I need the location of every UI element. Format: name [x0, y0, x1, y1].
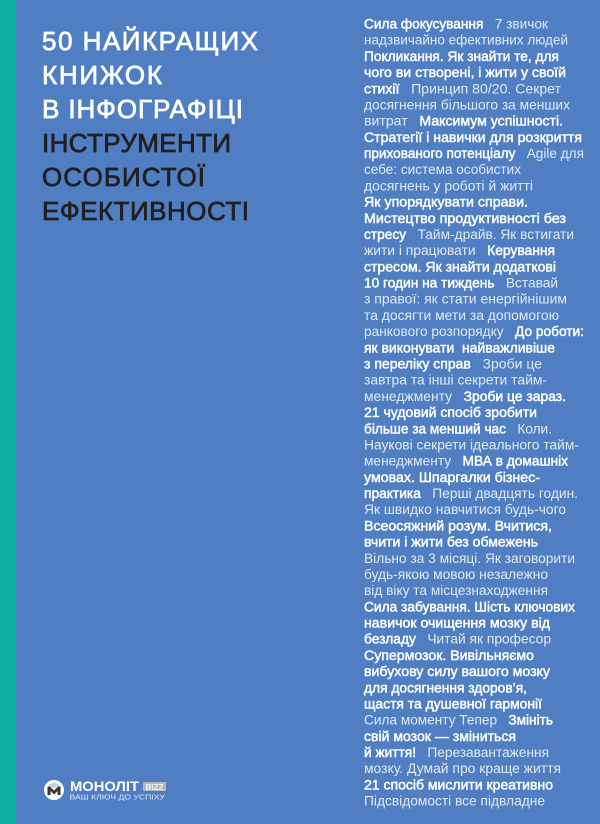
title: 50 НАЙКРАЩИХ [42, 26, 258, 56]
book list: себе: система особистих [364, 162, 521, 177]
icon: logo emblem [44, 780, 64, 800]
book list: менеджменту МВА в домашніх [364, 454, 568, 469]
book list: практика Перші двадцять годин. [364, 486, 578, 501]
book list: прихованого потенціалу Agile для [364, 146, 584, 161]
title [42, 26, 258, 124]
book list: завтра та інші секрети тайм- [364, 373, 547, 388]
book list: Сила моменту Тепер Змініть [364, 713, 553, 728]
book list: вибухову силу вашого мозку [364, 664, 550, 679]
book list: ранкового розпорядку До роботи: [364, 324, 584, 339]
logo wordmark: МОНОЛІТ [70, 779, 140, 794]
book list: Стратегії і навички для розкриття [364, 130, 582, 145]
book list: Супермозок. Вивільняємо [364, 648, 534, 663]
book list: 21 чудовий спосіб зробити [364, 405, 537, 420]
publisher logo [44, 779, 166, 802]
book list: 10 годин на тиждень Вставай [364, 276, 558, 290]
book list: стресу Тайм-драйв. Як встигати [364, 227, 574, 242]
subtitle [42, 128, 249, 226]
book list: стресом. Як знайти додаткові [364, 259, 556, 274]
book list: як виконувати найважливіше [364, 340, 555, 355]
book list: менеджменту Зроби це зараз. [364, 389, 566, 404]
book list: жити і працювати Керування [364, 243, 555, 258]
book list: надзвичайно ефективних людей [364, 33, 568, 48]
book list: від віку та місцезнаходження [364, 583, 548, 598]
book list: чого ви створені, і жити у своїй [364, 65, 566, 80]
book list: для досягнення здоров’я, [364, 680, 527, 695]
book list: Наукові секрети ідеального тайм- [364, 437, 579, 452]
book list: витрат Максимум успішності. [364, 114, 563, 129]
book list: вчити і жити без обмежень [364, 535, 538, 550]
book list: Всеосяжний розум. Вчитися, [364, 518, 552, 533]
book list: та досягти мети за допомогою [364, 308, 559, 323]
book list: Покликання. Як знайти те, для [364, 49, 559, 64]
book list: досягнень у роботі й житті [364, 178, 533, 193]
book list: мозку. Думай про краще життя [364, 761, 561, 776]
book list: Сила забування. Шість ключових [364, 599, 575, 614]
book list: Мистецтво продуктивності без [364, 211, 566, 226]
book list: Вільно за 3 місяці. Як заговорити [364, 551, 575, 566]
book list: будь-якою мовою незалежно [364, 567, 548, 582]
book list: досягнення більшого за менших [364, 98, 570, 112]
book list [364, 16, 584, 809]
book list: безладу Читай як професор [364, 632, 551, 647]
book list: Підсвідомості все підвладне [364, 794, 545, 809]
book list: Як упорядкувати справи. [364, 195, 528, 210]
book list: Як швидко навчитися будь-чого [364, 502, 566, 517]
book list: свій мозок — зміниться [364, 729, 516, 744]
subtitle: ІНСТРУМЕНТИ [42, 128, 231, 158]
book list: Сила фокусування 7 звичок [364, 16, 548, 32]
book list: з правої: як стати енергійнішим [364, 292, 567, 307]
book list: щастя та душевної гармонії [364, 696, 542, 712]
book list: й життя! Перезавантаження [364, 745, 549, 760]
logo badge: BIZZ [146, 783, 164, 792]
title: В ІНФОГРАФІЦІ [42, 94, 243, 124]
book list: навичок очищення мозку від [364, 616, 550, 630]
book list: стихії Принцип 80/20. Секрет [364, 81, 561, 96]
subtitle: ОСОБИСТОЇ [42, 162, 206, 192]
subtitle: ЕФЕКТИВНОСТІ [42, 196, 249, 226]
book list: більше за менший час Коли. [364, 421, 552, 436]
title: КНИЖОК [42, 60, 162, 90]
book list: умовах. Шпаргалки бізнес- [364, 470, 540, 485]
book list: з переліку справ Зроби це [364, 356, 542, 372]
book list: 21 спосіб мислити креативно [364, 777, 553, 792]
teal side stripe [0, 0, 16, 824]
logo tagline: ВАШ КЛЮЧ ДО УСПІХУ [70, 792, 165, 802]
